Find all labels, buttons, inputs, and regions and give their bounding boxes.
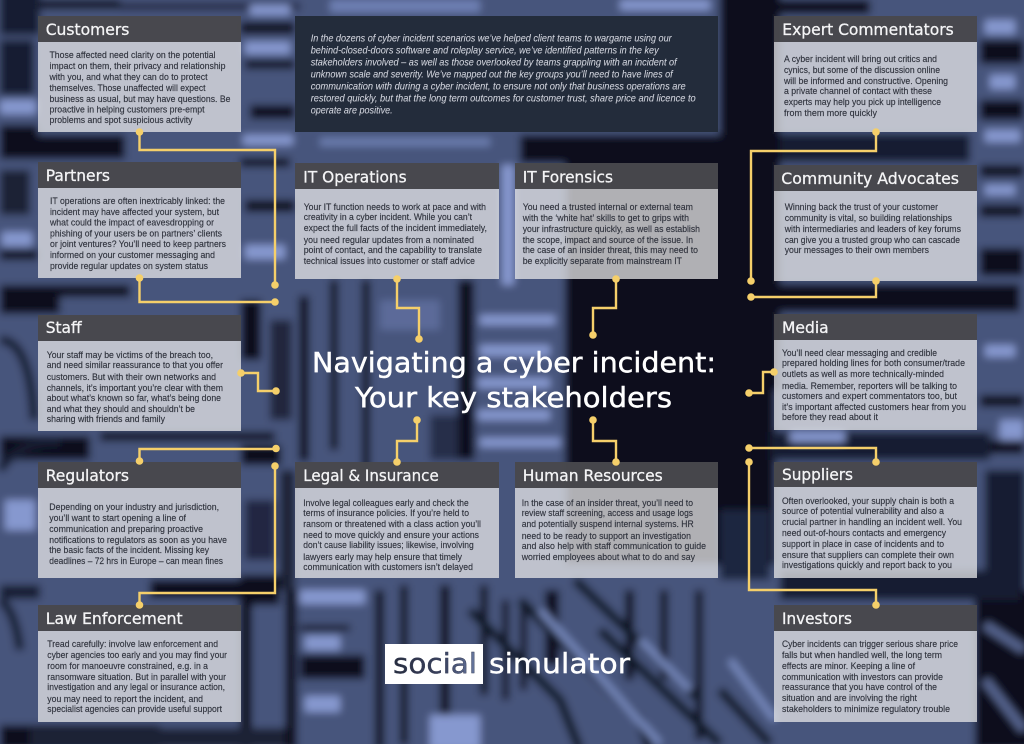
text: Human Resources body: In the case of an insider threat, you’ll need to [522,498,693,509]
heading: Human Resources: Human Resources [523,466,663,485]
text: IT Forensics body: the scope, impact and source of the issue. In [523,235,693,246]
text: Regulators body: you’ll want to start opening a line of [49,513,186,524]
text: IT Forensics body: You need a trusted internal or external team [523,202,693,213]
heading: Customers: Customers [46,20,129,39]
text: Expert Commentators body: will be informed and constructive. Opening [783,76,948,87]
text: IT Forensics body: your infrastructure quickly, as well as establish [523,224,700,235]
intro text panel [295,16,718,132]
panel: Customers [38,16,241,132]
text: Investors body: reassurance that you have control of the [782,682,937,693]
text: Media body: before they read about it [782,412,878,423]
title [312,346,716,414]
text: Media body: prepared holding lines for both consumer/trade [782,358,965,369]
intro text panel: operate are positive. [311,106,393,116]
text: Customers body: problems and spot suspicious activity [50,115,193,126]
connector: Community Advocates [747,277,880,301]
heading: Community Advocates: Community Advocates [781,169,959,188]
text: IT Operations body: technical issues into customer or staff advice [304,256,475,267]
connector: Law Enforcement [136,462,279,609]
text: Expert Commentators body: experts may help you pick up intelligence [784,97,941,108]
text: Human Resources body: and also help with staff communication to guide [522,541,706,552]
text: IT Operations body [304,202,487,267]
text: Regulators body: notifications to regulators as soon as you have [49,535,227,546]
panel: Regulators [38,462,241,578]
text: Investors body: effects are minor. Keeping a line of [782,661,915,672]
text: Staff body: about what’s known so far, what’s being done [47,393,221,404]
heading: Media: Media [782,318,829,337]
text: Investors body: communication with investors can provide [782,672,943,683]
heading: Law Enforcement: Law Enforcement [46,609,183,628]
panel: IT Operations [295,163,499,279]
text: Media body: it’s important affected customers hear from you [782,402,966,413]
text: Partners body: or joint ventures? You’ll need to keep partners [50,239,226,250]
text: Investors body [782,639,958,715]
text: Investors body: situation and are involving the right [782,693,917,704]
text: Customers body [49,50,230,126]
connector: Expert Commentators [747,128,880,285]
text: Law Enforcement body: specialist agencies can provide useful support [47,704,222,715]
heading: Expert Commentators: Expert Commentators [782,20,954,39]
text: Law Enforcement body: Tread carefully: involve law enforcement and [47,639,218,650]
text: Investors body: stakeholders to minimize regulatory trouble [782,704,950,715]
connector: Legal & Insurance [393,416,421,466]
text: IT Operations body: creativity in a cyber incident. While you can’t [304,212,472,223]
text: Human Resources body: need to be ready to support an investigation [522,531,691,542]
text: Partners body: phishing of your users be on partners’ clients [50,229,222,240]
intro text panel: In the dozens of cyber incident scenarios we’ve helped client teams to wargame using our [311,34,672,44]
text: Legal & Insurance body: lawyers early may help ensure that timely [303,552,462,563]
panel: Human Resources [515,462,718,578]
text: Human Resources body [521,498,706,563]
text: Law Enforcement body: investigation and any legal or insurance action, [47,682,225,693]
text: Community Advocates body [784,202,961,256]
text: Staff body: and need similar reassurance to that you offer [47,360,223,371]
panel: Investors [774,605,977,722]
text: Community Advocates body: community is vital, so building relationships [785,213,952,224]
text: Customers body: impact on them, their privacy and relationship [50,61,226,72]
text: Staff body: Your staff may be victims of the breach too, [47,350,213,361]
text: Staff body [47,350,223,425]
text: IT Operations body: point of contact, and the capability to translate [304,245,482,256]
text: Legal & Insurance body: ransom or threatened with a class action you’ll [303,519,481,530]
panel: Legal & Insurance [295,462,499,578]
text: IT Forensics body [522,202,700,267]
panel: IT Forensics [515,163,718,279]
text: Human Resources body: worried employees about what to do and say [521,552,695,563]
text: Law Enforcement body: cyber agencies too early and you may find your [47,650,227,661]
text: Legal & Insurance body: terms of insurance policies. If you’re held to [303,508,469,519]
text: Community Advocates body: with intermediaries and leaders of key forums [784,224,961,235]
text: Media body: You’ll need clear messaging and credible [782,348,937,359]
text: Legal & Insurance body: don’t cause liability issues; likewise, involving [303,540,474,551]
connector: IT Forensics [589,275,620,339]
panel: Community Advocates [774,165,977,281]
panel: Expert Commentators [774,16,977,132]
connector: Media [745,368,778,397]
intro text panel: restored quickly, but that the long term outcomes for customer trust, share price and licence to [311,94,696,104]
text: Partners body: what could the impact of eavesdropping or [49,218,214,229]
text: IT Operations body: expect the full facts of the incident immediately, [304,223,487,234]
panel: Suppliers [774,462,977,578]
text: Legal & Insurance body: communication with customers isn’t delayed [303,562,473,573]
text: Staff body: channels, it’s important you’re clear with them [47,383,223,394]
connector: Regulators [136,445,280,465]
text: Expert Commentators body: from them more quickly [784,108,877,119]
title: Navigating a cyber incident: [312,346,716,379]
text: Media body: outlets as well as more technically-minded [782,369,944,380]
text: Law Enforcement body: you may need to report the incident, and [47,694,203,705]
text: Customers body: with you, and what they can do to protect [49,72,208,83]
text: Law Enforcement body: ransomware situation. But in parallel with your [47,672,226,683]
text: Investors body: falls but when handled well, the long term [782,650,942,661]
text: Community Advocates body: your messages to their own members [785,245,929,256]
text: Suppliers body: support in place in case of incidents and to [782,539,944,550]
connector: Customers [136,128,279,289]
heading: Suppliers: Suppliers [782,465,853,484]
text: Suppliers body [782,496,962,571]
heading: Staff: Staff [46,318,83,337]
text: Partners body: provide regular updates on system status [50,261,208,272]
heading: Investors: Investors [782,609,852,628]
text: Partners body: incident may have affected your system, but [50,207,219,218]
heading: Partners: Partners [46,166,110,185]
connector: Partners [136,274,279,306]
text: Suppliers body: need out-of-hours contacts and emergency [782,528,946,539]
text: Suppliers body: investigations quickly and report back to you [782,560,952,571]
text: Law Enforcement body [47,639,227,715]
heading: IT Operations: IT Operations [303,168,407,186]
text: IT Operations body: Your IT function needs to work at pace and with [304,202,486,213]
panel: Partners [38,162,241,278]
text: Customers body: proactive in helping customers pre-empt [50,105,205,116]
text: Legal & Insurance body [303,498,481,573]
text: Human Resources body: and potentially suspend internal systems. HR [522,519,694,530]
intro text panel: unknown scale and severity. We’ve mapped out the key groups you’ll need to have lines of [311,70,674,80]
text: Expert Commentators body: cynics, but some of the discussion online [784,65,940,76]
text: Human Resources body: review staff screening, access and usage logs [522,508,693,519]
intro text panel: stakeholders involved – as well as those overlooked by teams grappling with an incident of [311,58,678,68]
text: Staff body: and what they should and shouldn’t be [47,404,195,415]
text: Community Advocates body: Winning back the trust of your customer [785,202,938,213]
text: Suppliers body: crucial partner in handling an incident well. You [782,517,962,528]
connector: Staff [237,369,280,395]
text: Customers body: Those affected need clarity on the potential [50,50,216,61]
text: Legal & Insurance body: need to move quickly and ensure your actions [303,530,479,541]
text: Community Advocates body: can give you a trusted group who can cascade [785,235,960,246]
panel: Staff [38,315,241,431]
text: Media body: media. Remember, reporters will be talking to [782,381,957,392]
text: Partners body [49,196,226,272]
text: IT Forensics body: with the ‘white hat’ skills to get to grips with [522,213,689,224]
connector: IT Operations [393,275,423,343]
text: Staff body: sharing with friends and family [47,414,165,425]
text: Staff body: customers. But with their own networks and [47,372,216,383]
logo: social simulator: simulator [489,647,631,680]
logo: social simulator [385,644,631,684]
intro text panel: behind-closed-doors software and roleplay service, we’ve identified patterns in the key [311,46,660,56]
text: Expert Commentators body [783,54,948,119]
text: Partners body: IT operations are often inextricably linked: the [50,196,225,207]
text: IT Operations body: you need regular updates from a nominated [304,235,474,246]
text: Suppliers body: ensure that suppliers can complete their own [782,550,954,561]
text: IT Forensics body: be explicitly separate from mainstream IT [523,256,682,267]
connector: Suppliers [745,444,880,466]
text: Suppliers body: Often overlooked, your supply chain is both a [782,496,955,507]
text: Regulators body [49,502,227,567]
heading: IT Forensics: IT Forensics [523,168,613,186]
panel: Law Enforcement [38,605,241,722]
text: Partners body: informed on your customer messaging and [50,250,215,261]
text: Expert Commentators body: a private channel of contact with these [784,86,932,97]
logo: social simulator: social [393,647,477,680]
text: Regulators body: deadlines – 72 hrs in Europe – can mean fines [49,556,223,567]
text: Regulators body: the basic facts of the incident. Missing key [49,545,209,556]
text: Media body [782,348,966,423]
connector: Human Resources [589,416,620,466]
text: Investors body: Cyber incidents can trigger serious share price [782,639,958,650]
text: Expert Commentators body: A cyber incident will bring out critics and [784,54,937,65]
text: Customers body: themselves. Those unaffected will expect [50,83,206,94]
text: Customers body: business as usual, but may have questions. Be [50,94,230,105]
heading: Regulators: Regulators [46,466,129,485]
panel: Media [774,314,977,430]
text: Suppliers body: source of potential vulnerability and also a [782,506,945,517]
intro text panel: communication with during a cyber incident, to ensure not only that business operations are [311,82,686,92]
text: Regulators body: Depending on your industry and jurisdiction, [49,502,219,513]
text: IT Forensics body: the case of an insider threat, this may need to [523,245,698,256]
text: Regulators body: communication and preparing proactive [49,524,203,535]
text: Legal & Insurance body: Involve legal colleagues early and check the [303,498,469,509]
text: Law Enforcement body: room for manoeuvre constrained, e.g. in a [47,661,209,672]
connector: Investors [745,458,880,609]
title: Your key stakeholders [354,381,672,414]
text: Media body: customers and expert commentators too, but [782,391,957,402]
heading: Legal & Insurance: Legal & Insurance [303,466,439,485]
